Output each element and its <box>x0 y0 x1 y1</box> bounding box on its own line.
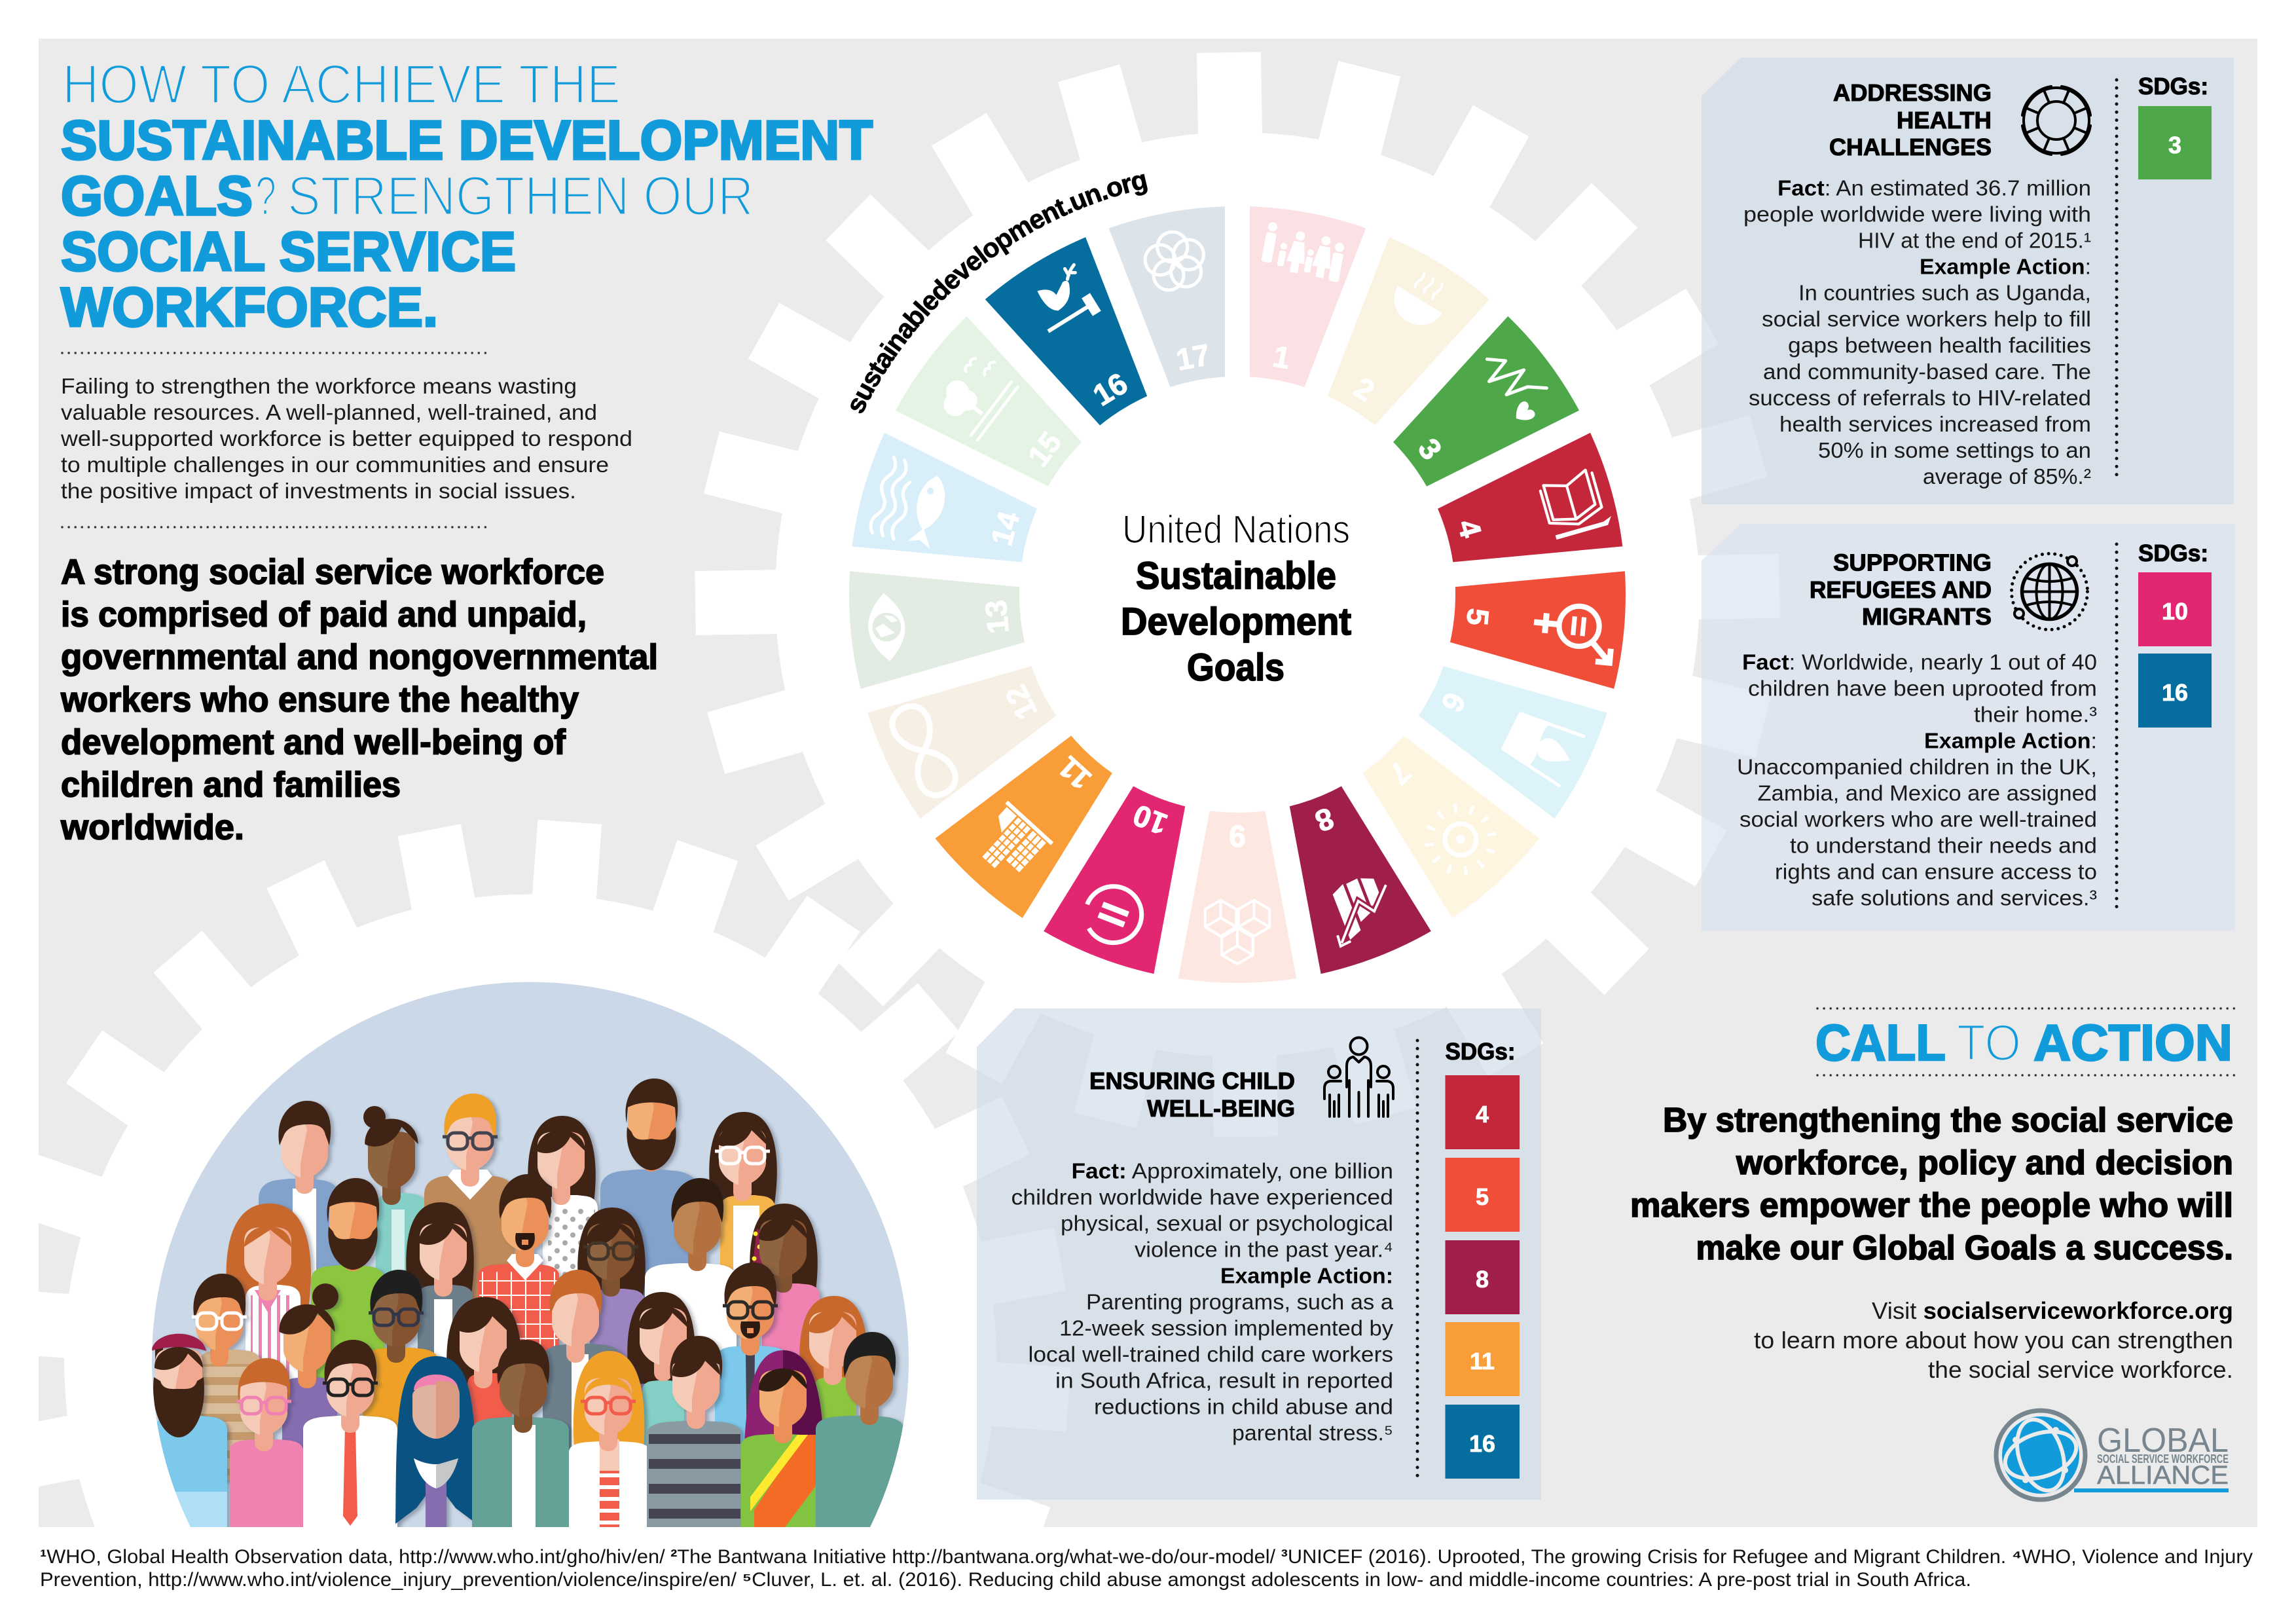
body text: success of referrals to HIV-related <box>1749 386 2091 410</box>
call to action statement: workforce, policy and decision <box>1736 1144 2233 1182</box>
body text: reductions in child abuse and <box>1094 1395 1393 1418</box>
SDG tags: 10 <box>2162 598 2188 625</box>
intro paragraph: to multiple challenges in our communities and ensure <box>61 452 609 477</box>
intro paragraph: well-supported workforce is better equipped to respond <box>60 426 632 451</box>
wedge: SDG 14 <box>848 432 1046 592</box>
panel: ensuring child well-being <box>977 1008 1541 1500</box>
call to action statement: By strengthening the social service <box>1663 1101 2233 1139</box>
body text: children have been uprooted from <box>1748 676 2097 701</box>
wheel centre text: United Nations <box>1122 507 1350 551</box>
SDG tags: SDGs: <box>2138 73 2208 100</box>
SDG tags: 16 <box>1469 1430 1495 1457</box>
body text: social service workers help to fill <box>1762 306 2091 331</box>
heading: SUPPORTING <box>1833 549 1992 576</box>
body text: 12-week session implemented by <box>1059 1316 1394 1340</box>
gear: main behind SDG wheel <box>695 52 1780 1137</box>
wedge: SDG 1: 1 <box>1270 339 1293 375</box>
call to action heading: CALL <box>1815 1014 1946 1071</box>
wedge: SDG 3: 3 <box>1412 432 1449 466</box>
body text: average of 85%.² <box>1923 464 2091 489</box>
body text: rights and can ensure access to <box>1775 859 2097 884</box>
footnotes: ¹WHO, Global Health Observation data, http://www.who.int/gho/hiv/en/ ²The Bantwana Initiative http://bantwana.org/what-we-do/our-model/ ³UNICEF (2016). Uprooted, The growing Crisis for Refugee and Migrant Children. ⁴WHO, Violence and Injury <box>40 1546 2253 1568</box>
wedge: SDG 9 <box>1178 811 1296 983</box>
wedge: SDG 16: 16 <box>1087 366 1133 413</box>
wedge: SDG 10: 10 <box>1128 798 1172 842</box>
statement: a strong social service workforce: workers who ensure the healthy <box>60 680 579 719</box>
body text: In countries such as Uganda, <box>1798 280 2091 305</box>
SDG tags: 3 <box>2168 132 2181 158</box>
wheel centre text: Goals <box>1187 646 1285 689</box>
body text: Fact: An estimated 36.7 million <box>1777 175 2091 200</box>
call to action statement <box>1630 1101 2233 1267</box>
body text: health services increased from <box>1779 412 2091 436</box>
body text: Fact: Worldwide, nearly 1 out of 40 <box>1742 650 2097 674</box>
body text: Parenting programs, such as a <box>1086 1290 1394 1314</box>
title: SOCIAL SERVICE <box>61 221 516 282</box>
wedge: SDG 7 <box>1339 714 1542 921</box>
heading: WELL-BEING <box>1147 1095 1295 1122</box>
wedge: SDG 14: 14 <box>984 507 1026 549</box>
wedge: SDG 6: 6 <box>1434 687 1472 718</box>
wheel centre text <box>1121 507 1351 689</box>
wedge: SDG 5: 5 <box>1460 607 1495 627</box>
wedge: SDG 8 <box>1260 775 1432 978</box>
heading: ADDRESSING <box>1833 79 1992 106</box>
logo: Global Social Service Workforce Alliance: GLOBAL <box>2097 1422 2229 1460</box>
wedge: SDG 13 <box>845 556 1027 690</box>
body text: Fact: Approximately, one billion <box>1071 1159 1393 1183</box>
body text <box>1737 650 2097 910</box>
statement: a strong social service workforce: development and well-being of <box>61 723 566 762</box>
SDG tags: 4 <box>1476 1101 1489 1128</box>
wedge: SDG 17: 17 <box>1173 337 1212 377</box>
body text: and community-based care. The <box>1763 360 2091 384</box>
heading <box>1810 549 1992 630</box>
logo: Global Social Service Workforce Alliance: ALLIANCE <box>2097 1461 2229 1490</box>
heading <box>1089 1067 1295 1122</box>
icon: lifebuoy <box>2022 86 2090 155</box>
body text: Unaccompanied children in the UK, <box>1737 754 2097 779</box>
title <box>61 54 873 338</box>
statement: a strong social service workforce: A strong social service workforce <box>61 553 604 592</box>
call to action statement: make our Global Goals a success. <box>1696 1229 2233 1267</box>
body text: 50% in some settings to an <box>1818 438 2091 462</box>
heading <box>1829 79 1992 160</box>
logo: Global Social Service Workforce Alliance: SOCIAL SERVICE WORKFORCE <box>2097 1452 2229 1466</box>
call to action heading <box>1815 1014 2232 1071</box>
body text: to understand their needs and <box>1790 833 2097 858</box>
wedge: SDG 12 <box>864 638 1070 821</box>
title: WORKFORCE. <box>61 276 438 338</box>
SDG tags: 5 <box>1476 1183 1489 1210</box>
wedge: SDG 3 <box>1374 314 1583 511</box>
wedge: SDG 4 <box>1429 432 1627 592</box>
wedge: SDG 4: 4 <box>1451 516 1489 542</box>
wedge: SDG 5 <box>1448 556 1630 690</box>
footnotes: Prevention, http://www.who.int/violence_injury_prevention/violence/inspire/en/ ⁵Cluver, L. et. al. (2016). Reducing child abuse amongst adolescents in low- and middle-income countries: A pre-post trial in South Africa. <box>40 1569 1971 1591</box>
heading: MIGRANTS <box>1862 603 1992 630</box>
icon: globe <box>2011 554 2087 630</box>
body text: in South Africa, result in reported <box>1055 1369 1393 1392</box>
heading: HEALTH <box>1897 107 1992 134</box>
body text: Example Action: <box>1924 728 2097 753</box>
wedge: SDG 17 <box>1108 202 1256 393</box>
wedge: SDG 9: 9 <box>1229 819 1246 853</box>
SDG tags: 16 <box>2162 679 2188 706</box>
intro paragraph: valuable resources. A well-planned, well-trained, and <box>61 400 597 424</box>
footnotes <box>40 1546 2253 1591</box>
intro paragraph: the positive impact of investments in social issues. <box>61 479 576 503</box>
intro paragraph: Failing to strengthen the workforce means wasting <box>61 374 577 398</box>
title: HOW TO ACHIEVE THE <box>62 54 621 115</box>
SDG tags <box>2138 73 2212 179</box>
body text: people worldwide were living with <box>1743 202 2091 227</box>
curved URL: sustainabledevelopment.un.org: sustainabledevelopment.un.org <box>850 174 1148 414</box>
wedge: SDG 10 <box>1042 775 1214 978</box>
body text: Zambia, and Mexico are assigned <box>1757 781 2097 805</box>
title: STRENGTHEN OUR <box>287 165 754 227</box>
SDG tags: 8 <box>1476 1266 1489 1293</box>
title: GOALS <box>61 165 253 227</box>
panel: addressing health challenges <box>1702 58 2234 504</box>
heading: ENSURING CHILD <box>1089 1067 1295 1094</box>
heading: CHALLENGES <box>1829 134 1992 160</box>
body text: HIV at the end of 2015.¹ <box>1858 228 2091 253</box>
wedge: SDG 11: 11 <box>1051 750 1098 796</box>
intro paragraph <box>60 374 632 503</box>
title: SUSTAINABLE DEVELOPMENT <box>61 109 873 171</box>
wedge: SDG 2: 2 <box>1349 370 1381 408</box>
icon: family <box>1324 1037 1393 1116</box>
SDG tags <box>1446 1038 1520 1479</box>
visit link text: the social service workforce. <box>1928 1356 2233 1383</box>
wedge: SDG 15: 15 <box>1021 426 1068 473</box>
statement: a strong social service workforce: worldwide. <box>60 808 244 847</box>
wedge: SDG 8: 8 <box>1311 801 1339 839</box>
wedge: SDG 15 <box>892 314 1101 511</box>
visit link text: Visit socialserviceworkforce.org <box>1872 1297 2233 1324</box>
wedge: SDG 2 <box>1301 233 1492 442</box>
wedge: SDG 12: 12 <box>998 680 1044 725</box>
SDG tags: 11 <box>1470 1348 1495 1375</box>
wedge: SDG 7: 7 <box>1383 755 1418 792</box>
body text <box>1743 175 2091 489</box>
body text: parental stress.⁵ <box>1232 1421 1393 1445</box>
statement: a strong social service workforce <box>60 553 658 847</box>
body text: their home.³ <box>1974 702 2097 727</box>
visit link text <box>1754 1297 2233 1383</box>
statement: a strong social service workforce: governmental and nongovernmental <box>61 638 658 677</box>
heading: REFUGEES AND <box>1810 576 1992 603</box>
call to action heading: ACTION <box>2033 1014 2232 1071</box>
body text: physical, sexual or psychological <box>1061 1211 1393 1235</box>
gear: lower-left behind people <box>0 820 1070 1624</box>
title: ? <box>255 165 276 227</box>
body text: safe solutions and services.³ <box>1812 885 2097 910</box>
body text: violence in the past year.⁴ <box>1135 1238 1393 1261</box>
SDG tags <box>2138 540 2212 728</box>
visit link text: to learn more about how you can strengthen <box>1754 1327 2233 1354</box>
wheel centre text: Sustainable <box>1136 555 1336 597</box>
wedge: SDG 11 <box>932 714 1135 921</box>
wedge: SDG 13: 13 <box>978 599 1015 635</box>
body text: social workers who are well-trained <box>1740 807 2097 832</box>
people illustration <box>131 976 930 1536</box>
body text: gaps between health facilities <box>1788 333 2091 358</box>
call to action statement: makers empower the people who will <box>1630 1187 2233 1225</box>
wheel centre text: Development <box>1121 600 1351 643</box>
statement: a strong social service workforce: children and families <box>61 765 401 804</box>
SDG tags: SDGs: <box>2138 540 2208 566</box>
call to action heading: TO <box>1957 1014 2021 1071</box>
statement: a strong social service workforce: is comprised of paid and unpaid, <box>61 595 587 634</box>
body text: Example Action: <box>1920 254 2091 279</box>
body text: Example Action: <box>1220 1264 1393 1287</box>
wedge: SDG 16 <box>983 233 1174 442</box>
body text <box>1011 1159 1394 1445</box>
wedge: SDG 1 <box>1219 202 1367 393</box>
logo: Global Social Service Workforce Alliance <box>1996 1411 2229 1500</box>
body text: children worldwide have experienced <box>1011 1185 1393 1209</box>
SDG tags: SDGs: <box>1446 1038 1515 1065</box>
wedge: SDG 6 <box>1404 638 1611 821</box>
body text: local well-trained child care workers <box>1028 1342 1393 1366</box>
panel: supporting refugees and migrants <box>1702 524 2234 931</box>
